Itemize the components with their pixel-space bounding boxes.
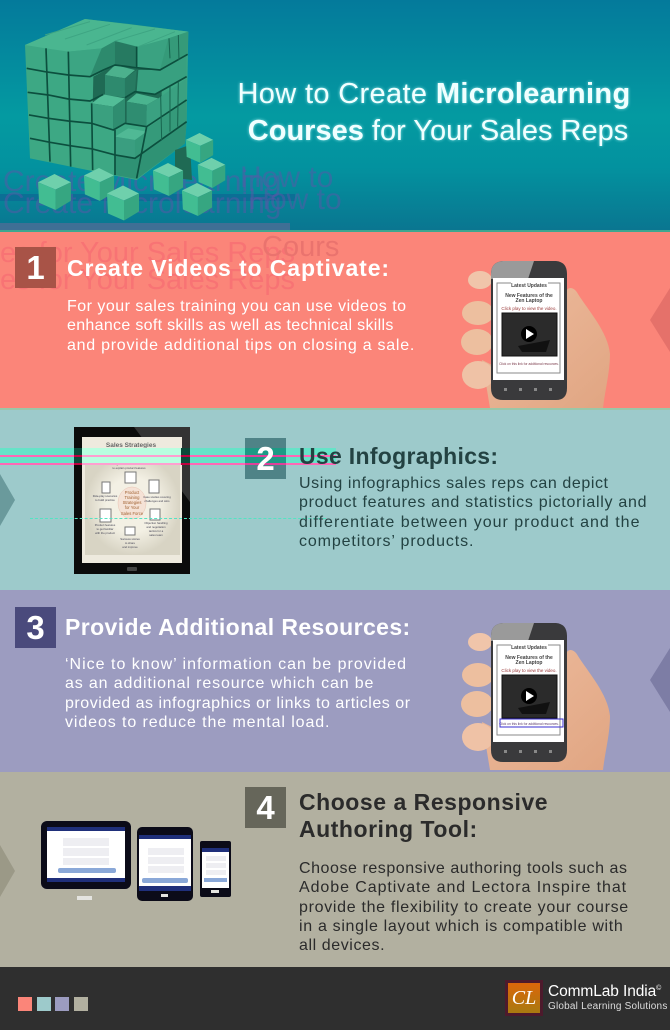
glitch stripes across panel <box>0 448 336 463</box>
body text 1: enhance soft skills as well as technical skills <box>67 317 394 334</box>
body text 1 <box>67 298 415 354</box>
heading 4 <box>299 789 548 842</box>
number badge 3: 3 <box>26 609 45 646</box>
icon: tablet with infographic: tactics for a <box>149 529 164 533</box>
body text 4: in a single layout which is compatible with <box>299 918 624 935</box>
icon: tablet with infographic: with the product <box>95 531 115 535</box>
heading 4: Choose a Responsive <box>299 789 548 815</box>
glitch pink lines <box>0 455 336 465</box>
body text 1: For your sales training you can use videos to <box>67 298 407 315</box>
title <box>237 78 631 148</box>
panel 1: create videos <box>0 230 670 410</box>
icon: tablet with infographic: sales team <box>149 533 163 537</box>
ghost print: overlapping title: How to <box>248 183 342 216</box>
icon: tablet with infographic: challenges and wins <box>144 499 170 503</box>
body text 2: differentiate between your product and the <box>299 514 640 531</box>
icon: tablet with infographic: Objection handling <box>144 521 168 525</box>
phone in hand with video: New Features of the <box>505 293 553 299</box>
ghost print: sales reps: es for Your Sales Reps <box>0 264 295 296</box>
panel 4: responsive authoring tool <box>0 772 670 967</box>
body text 2: competitors’ products. <box>299 533 474 550</box>
phone in hand with link: New Features of the <box>505 655 553 661</box>
phone in hand with link: Latest Updates <box>511 645 547 651</box>
title: How to Create Microlearning <box>237 78 631 110</box>
icon: tablet with infographic <box>74 427 190 574</box>
phone in hand with video: Click play to view the video. <box>501 306 557 311</box>
body text 2 <box>299 475 647 550</box>
number badge 2: 2 <box>256 440 275 477</box>
phone in hand with link: Click on this link for additional resources. <box>499 722 559 726</box>
icon: tablet with infographic: Strategies <box>123 500 141 505</box>
body text 3: provided as infographics or links to articles or <box>65 695 411 712</box>
number badge 4 <box>245 787 286 828</box>
number badge 3 <box>15 607 56 648</box>
ghost print: sales reps: Cours <box>262 231 339 263</box>
icon: tablet with infographic: to get familiar <box>97 527 113 531</box>
body text 4 <box>299 860 629 954</box>
logo name: CommLab India© <box>548 983 661 1000</box>
body text 4: Choose responsive authoring tools such as <box>299 860 628 877</box>
icon: tablet with infographic: Role-play scenarios <box>93 494 118 498</box>
arrow: right side marker 3 <box>650 648 670 712</box>
body text 4: provide the flexibility to create your course <box>299 899 629 916</box>
title: Courses for Your Sales Reps <box>248 115 628 147</box>
icon: tablet with infographic: to share <box>125 541 135 545</box>
heading 2: Use Infographics: <box>299 443 498 469</box>
icon: tablet with infographic: Sales Force <box>121 511 144 516</box>
icon: tablet with infographic: Product features <box>95 523 116 527</box>
body text 2: Using infographics sales reps can depict <box>299 475 609 492</box>
phone in hand with link <box>461 623 610 770</box>
icon: tablet with infographic: and improve <box>122 545 138 549</box>
icon: tablet with infographic: Product <box>125 490 140 495</box>
icon: tablet with infographic: for Your <box>125 505 140 510</box>
phone in hand with video: Zen Laptop <box>516 298 542 304</box>
body text 3 <box>65 656 411 731</box>
number badge 2 <box>245 438 286 479</box>
ghost print: sales reps: es for Your Sales Reps <box>0 237 295 269</box>
ghost print: overlapping title: How to <box>240 161 333 194</box>
icon: tablet with infographic: Case studies covering <box>143 495 171 499</box>
icon: tablet with infographic: to explain product features <box>113 466 146 470</box>
icon: tablet with infographic: and negotiation <box>146 525 166 529</box>
glitch dashed line <box>30 518 326 519</box>
footer <box>0 967 670 1030</box>
icon: tablet with infographic: Training <box>125 495 140 500</box>
logo mark <box>508 983 540 1013</box>
logo tagline: Global Learning Solutions <box>548 1001 668 1012</box>
arrow: left side marker 4 <box>0 845 15 897</box>
arrow: right side marker 1 <box>650 288 670 352</box>
ghost print: overlapping title: Create Microlearning <box>3 187 281 220</box>
loose green cubes <box>38 133 226 220</box>
panel 3: additional resources <box>0 590 670 772</box>
phone in hand with link: Zen Laptop <box>516 660 542 666</box>
ghost print: sales reps <box>0 231 339 296</box>
header banner <box>0 0 670 232</box>
phone in hand with video <box>461 261 610 408</box>
icon: responsive devices <box>41 821 231 901</box>
body text 4: all devices. <box>299 937 385 954</box>
body text 3: as an additional resource which can be <box>65 675 374 692</box>
number badge 1: 1 <box>26 249 45 286</box>
phone in hand with video: Click on this link for additional resources. <box>499 362 559 366</box>
body text 2: product features and statistics pictorially and <box>299 494 647 511</box>
icon: tablet with infographic: Success stories <box>120 537 140 541</box>
heading 1: Create Videos to Captivate: <box>67 255 390 281</box>
icon: green block cube <box>25 19 188 180</box>
logo <box>505 980 668 1016</box>
heading 3: Provide Additional Resources: <box>65 614 411 640</box>
icon: tablet with infographic: Augment software demos <box>113 462 145 466</box>
body text 4: Adobe Captivate and Lectora Inspire that <box>299 879 627 896</box>
panel 2: infographics <box>0 410 670 590</box>
colour key squares <box>18 997 88 1011</box>
body text 3: videos to reduce the mental load. <box>65 714 330 731</box>
heading 4: Authoring Tool: <box>299 816 478 842</box>
ghost print: overlapping title <box>0 161 342 230</box>
logo mark: CL <box>512 987 536 1009</box>
body text 3: ‘Nice to know’ information can be provided <box>65 656 407 673</box>
body text 1: and provide additional tips on closing a sale. <box>67 337 415 354</box>
icon: tablet with infographic: Sales Strategies <box>106 442 156 449</box>
phone in hand with link: Click play to view the video. <box>501 668 557 673</box>
phone in hand with video: Latest Updates <box>511 283 547 289</box>
number badge 1 <box>15 247 56 288</box>
arrow: left side marker 2 <box>0 474 15 526</box>
number badge 4: 4 <box>256 789 275 826</box>
icon: tablet with infographic: to build practice <box>95 498 115 502</box>
ghost print: overlapping title: Create Microlearning <box>3 165 281 198</box>
